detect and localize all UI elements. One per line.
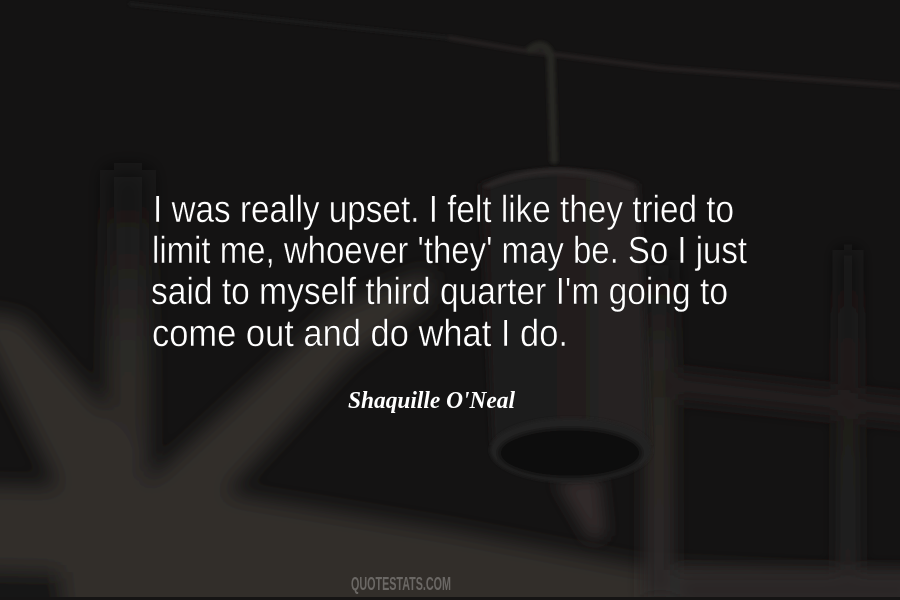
- watermark: QUOTESTATS.COM: [351, 574, 451, 594]
- can opening: [490, 418, 652, 482]
- quote text: come out and do what I do.: [152, 313, 568, 355]
- quote text: said to myself third quarter I'm going to: [151, 271, 728, 313]
- blurred window frame left: [0, 170, 900, 600]
- hanging can body: [480, 170, 650, 445]
- blurred window frame right: [644, 250, 900, 600]
- quote text: I was really upset. I felt like they tried to: [153, 189, 734, 231]
- bottom edge: [0, 597, 900, 600]
- can reflection: [555, 478, 606, 540]
- can rim: [482, 168, 636, 188]
- wire and hook: [130, 4, 900, 160]
- quote text: [151, 189, 747, 355]
- author signature: Shaquille O'Neal: [348, 388, 515, 414]
- quote text: limit me, whoever 'they' may be. So I just: [152, 230, 747, 272]
